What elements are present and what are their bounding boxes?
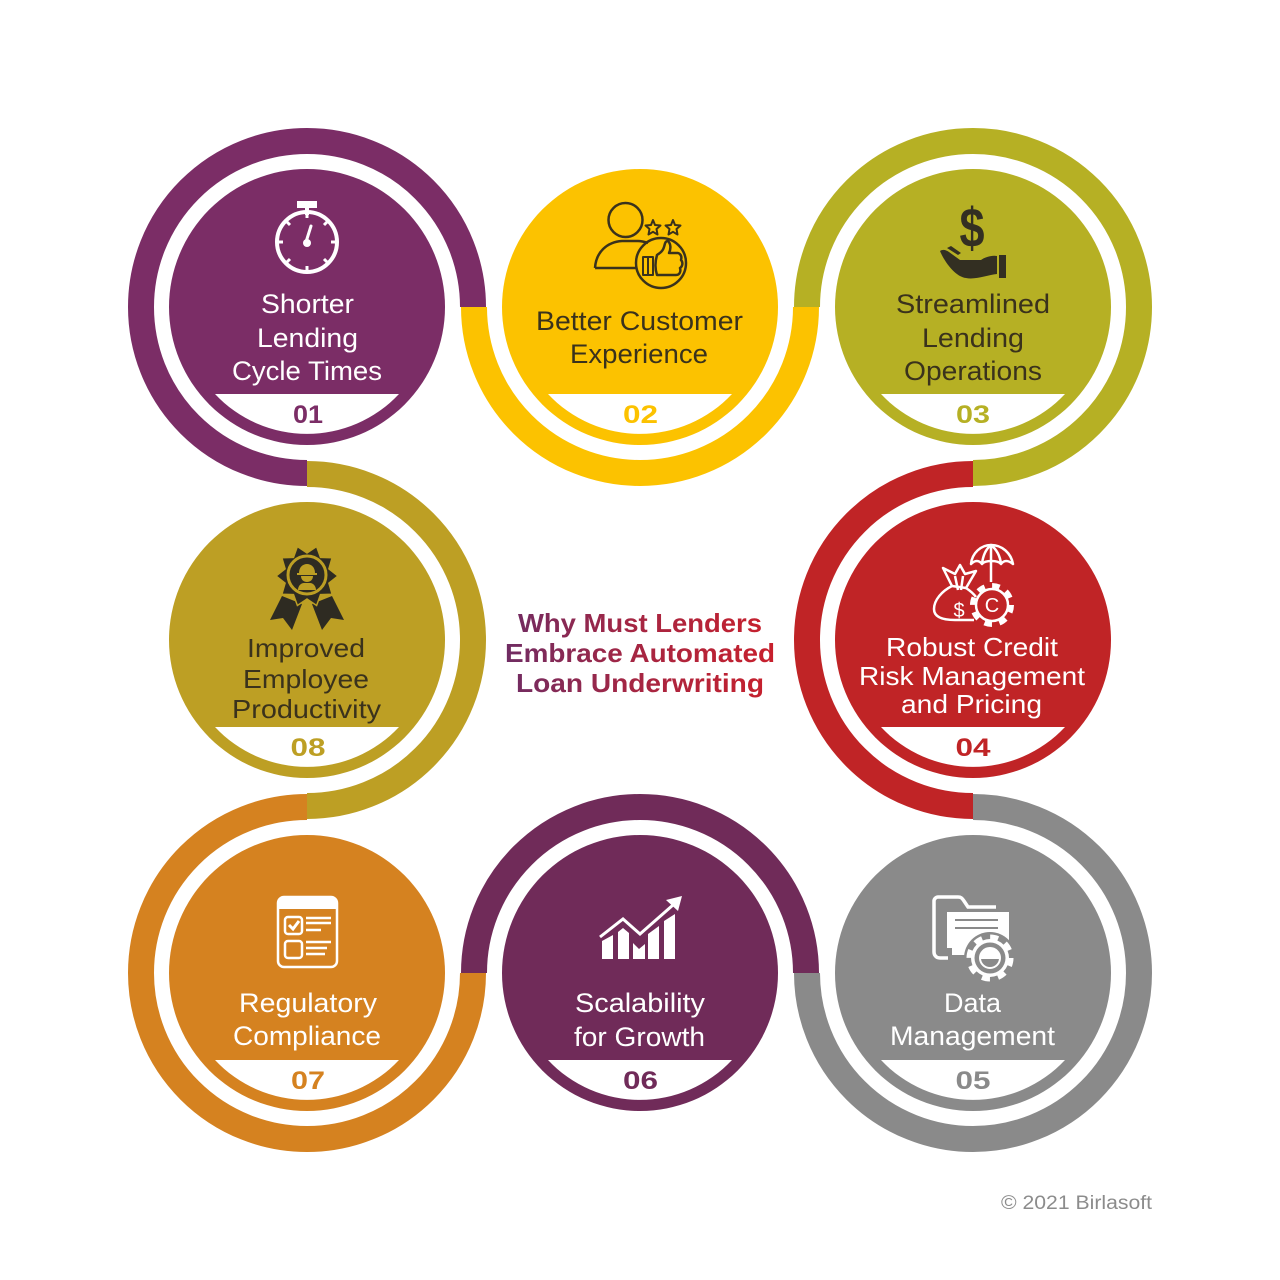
ring: 04 red [807,474,973,806]
text: label 02 [536,306,743,369]
panel: 05 Data Management [835,835,1111,1111]
title [505,608,775,698]
icon: customer with stars and thumbs up [595,203,686,288]
title: Why Must Lenders [518,608,762,638]
number tab 05 [881,1060,1065,1100]
panel: 02 Better Customer Experience [502,169,778,445]
text: label 03: Lending [922,323,1024,353]
text: label 08: Employee [243,664,369,694]
copyright: © 2021 Birlasoft [1001,1193,1153,1214]
text: label 08: Improved [247,633,365,663]
ring: 07 orange [141,807,473,1139]
text: label 05 [890,988,1056,1051]
number tab 01 [215,394,399,434]
text: label 08: Productivity [232,694,381,724]
number tab 07 [215,1060,399,1100]
icon: money bag, umbrella and gear: $ [953,600,965,622]
text: label 01: Lending [257,323,358,353]
ring: 08 gold [307,474,473,806]
ring: 01 purple [141,141,473,473]
text: label 06 [574,988,706,1052]
icon: dollar over hand: $ [960,196,984,259]
ring: 03 olive [807,141,1139,473]
panel: 08 Improved Employee Productivity [169,502,445,778]
ring: 02 yellow [474,307,806,473]
number tab 02: 02 [623,401,658,429]
panel: 06 Scalability for Growth [502,835,778,1111]
text: label 02: Better Customer [536,306,743,336]
text: label 04 [859,632,1086,719]
icon: money bag, umbrella and gear: C [985,595,999,617]
panel: 07 Regulatory Compliance [169,835,445,1111]
text: label 05: Data [944,988,1002,1018]
text: label 06: for Growth [574,1022,705,1052]
text: label 07: Regulatory [239,988,378,1018]
text: label 04: Risk Management [859,661,1086,691]
number tab 02 [548,394,732,434]
title: Loan Underwriting [516,668,764,698]
text: label 02: Experience [570,339,708,369]
title: Embrace Automated [505,638,775,668]
text: label 04: and Pricing [901,689,1042,719]
number tab 04 [881,727,1065,767]
panel: 04 Robust Credit Risk Management and Pricing [835,502,1111,778]
icon: stopwatch [277,201,337,272]
text: label 05: Management [890,1021,1056,1051]
ring: 05 grey [807,807,1139,1139]
number tab 01: 01 [293,401,323,429]
number tab 08: 08 [290,734,326,762]
text: label 01: Cycle Times [232,356,382,386]
number tab 07: 07 [291,1067,325,1095]
text: label 07 [233,988,381,1051]
text: label 01 [232,289,382,386]
text: label 01: Shorter [261,289,354,319]
text: label 03: Operations [904,356,1042,386]
number tab 06: 06 [623,1067,658,1095]
text: label 06: Scalability [575,988,706,1018]
icon: money bag, umbrella and gear [934,545,1013,624]
number tab 06 [548,1060,732,1100]
text: label 03 [896,289,1050,386]
text: label 03: Streamlined [896,289,1050,319]
ring: 06 purple [474,807,806,973]
number tab 04: 04 [956,734,991,762]
text: label 08 [232,633,381,724]
panel: 01 Shorter Lending Cycle Times [169,169,445,445]
number tab 03 [881,394,1065,434]
number tab 08 [215,727,399,767]
icon: award badge with worker [270,546,344,630]
icon: rising bar chart with arrow [600,896,682,959]
number tab 03: 03 [956,401,990,429]
icon: dollar over hand [940,196,1006,278]
text: label 07: Compliance [233,1021,381,1051]
icon: folder with gear [934,897,1016,984]
number tab 05: 05 [956,1067,991,1095]
text: label 04: Robust Credit [886,632,1059,662]
panel: 03 Streamlined Lending Operations [835,169,1111,445]
icon: checklist [278,897,337,967]
